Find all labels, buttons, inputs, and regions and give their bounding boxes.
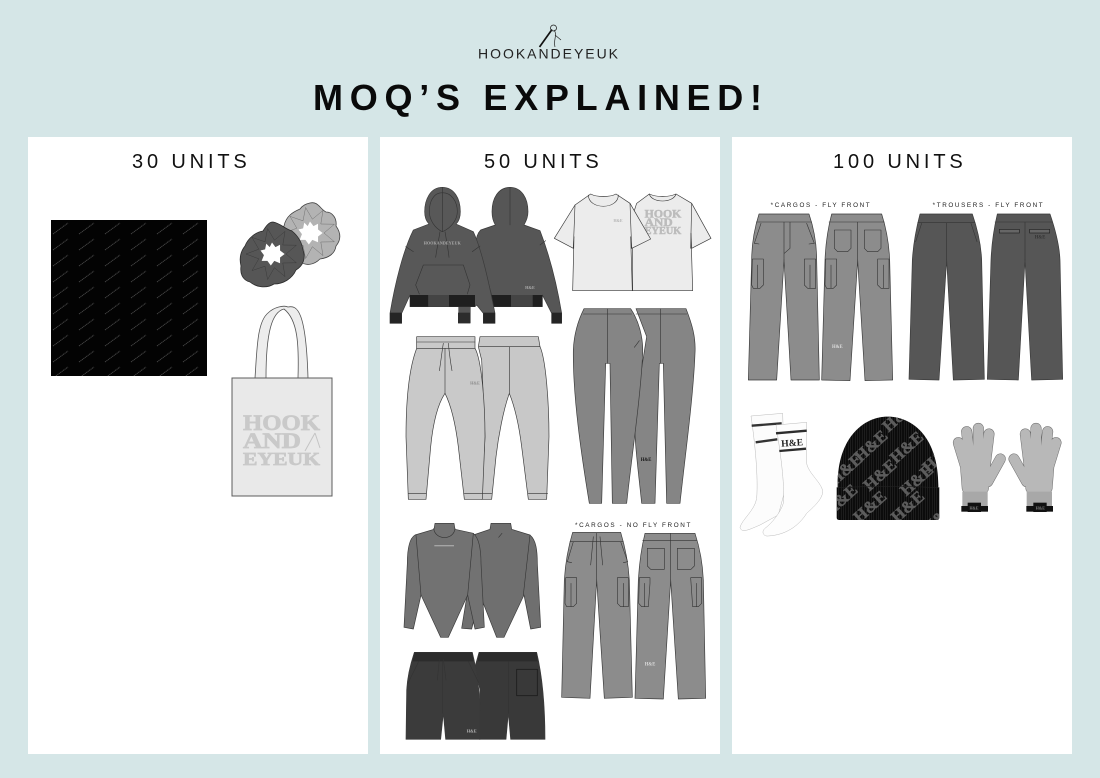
heading: 100 units: 100 UNITS: [833, 151, 967, 173]
light scrunchie: [280, 203, 340, 264]
tote bag: [232, 306, 332, 496]
leggings back: H&E: [641, 458, 651, 463]
label: cargos no fly front: *CARGOS - NO FLY FRONT: [575, 522, 690, 529]
beanie: H&E: [887, 487, 928, 526]
cargos no fly front: back: [635, 533, 706, 699]
trousers: front: [909, 214, 984, 380]
lower garments group: [404, 522, 706, 739]
beanie: [836, 416, 940, 520]
label: trousers fly front: *TROUSERS - FLY FRONT: [933, 202, 1043, 209]
trousers: back: H&E: [1035, 236, 1045, 241]
tote print: HOOK: [243, 410, 320, 435]
heading: 30 units: 30 UNITS: [132, 151, 251, 173]
shorts front: H&E: [467, 729, 477, 734]
tote print: EYEUK: [243, 449, 320, 469]
beanie: H&E: [850, 426, 891, 466]
beanie: H&E: [878, 396, 919, 436]
panel: 30 units: [28, 137, 368, 754]
panel: 50 units: [380, 137, 720, 754]
scarf fabric: [51, 220, 207, 376]
logo wordmark: HOOKANDEYEUK: [478, 46, 619, 62]
beanie: H&E: [849, 487, 890, 526]
cargos no fly front: front: [562, 532, 655, 698]
t-shirt back: AND: [645, 217, 673, 229]
panel: 100 units: [732, 137, 1072, 754]
beanie: H&E: [918, 437, 959, 476]
upper garments group: [390, 187, 711, 503]
hoodie back: [458, 187, 562, 323]
cargos fly front: back: H&E: [832, 345, 843, 350]
tote body: [232, 378, 332, 496]
beanie: H&E: [859, 455, 900, 495]
hoodie back: H&E: [525, 285, 535, 290]
t-shirt back: HOOK: [645, 208, 682, 220]
leggings front: [573, 309, 643, 503]
icon: needle and thread: [540, 25, 561, 47]
beanie: H&E: [886, 427, 927, 467]
bodysuit front: [404, 523, 484, 637]
sock: front: H&E: [781, 437, 804, 450]
trousers: back: [987, 214, 1063, 380]
shorts front: [406, 652, 480, 739]
t-shirt front: H&E: [613, 218, 623, 223]
beanie: H&E: [820, 480, 861, 520]
shorts back: [475, 652, 545, 739]
hoodie front: HOOKANDEYEUK: [424, 241, 462, 246]
beanie: H&E: [896, 460, 937, 500]
tote print: [243, 410, 320, 469]
joggers front: H&E: [470, 381, 480, 386]
sock: back: [740, 413, 785, 531]
glove: right: H&E: [1036, 505, 1045, 510]
title: MOQ’S EXPLAINED!: [313, 77, 762, 118]
t-shirt front: [554, 194, 651, 291]
glove: right: [1014, 428, 1056, 512]
tote handles: [255, 306, 308, 378]
glove: left: H&E: [969, 505, 979, 510]
cargos fly front: front: [748, 214, 819, 380]
cargos fly front: back: [822, 214, 893, 381]
logo: hookandeyeuk: [478, 25, 619, 62]
scrunchies: [240, 203, 340, 287]
joggers front: [406, 337, 485, 499]
t-shirt back: EYEUK: [645, 226, 682, 237]
tote print: AND: [243, 428, 301, 453]
leggings back: [635, 309, 695, 503]
socks: [740, 413, 823, 536]
beanie: H&E: [918, 498, 959, 538]
label: cargos fly front: *CARGOS - FLY FRONT: [771, 202, 870, 209]
cargos no fly front: front: H&E: [645, 662, 655, 667]
hoodie front: [390, 187, 495, 323]
heading: 50 units: 50 UNITS: [484, 151, 603, 173]
dark scrunchie: [240, 222, 304, 287]
t-shirt back: [632, 194, 711, 291]
glove: left: [958, 428, 1000, 512]
joggers back: [478, 337, 549, 499]
bodysuit back: [462, 523, 541, 637]
beanie: H&E: [825, 449, 866, 489]
